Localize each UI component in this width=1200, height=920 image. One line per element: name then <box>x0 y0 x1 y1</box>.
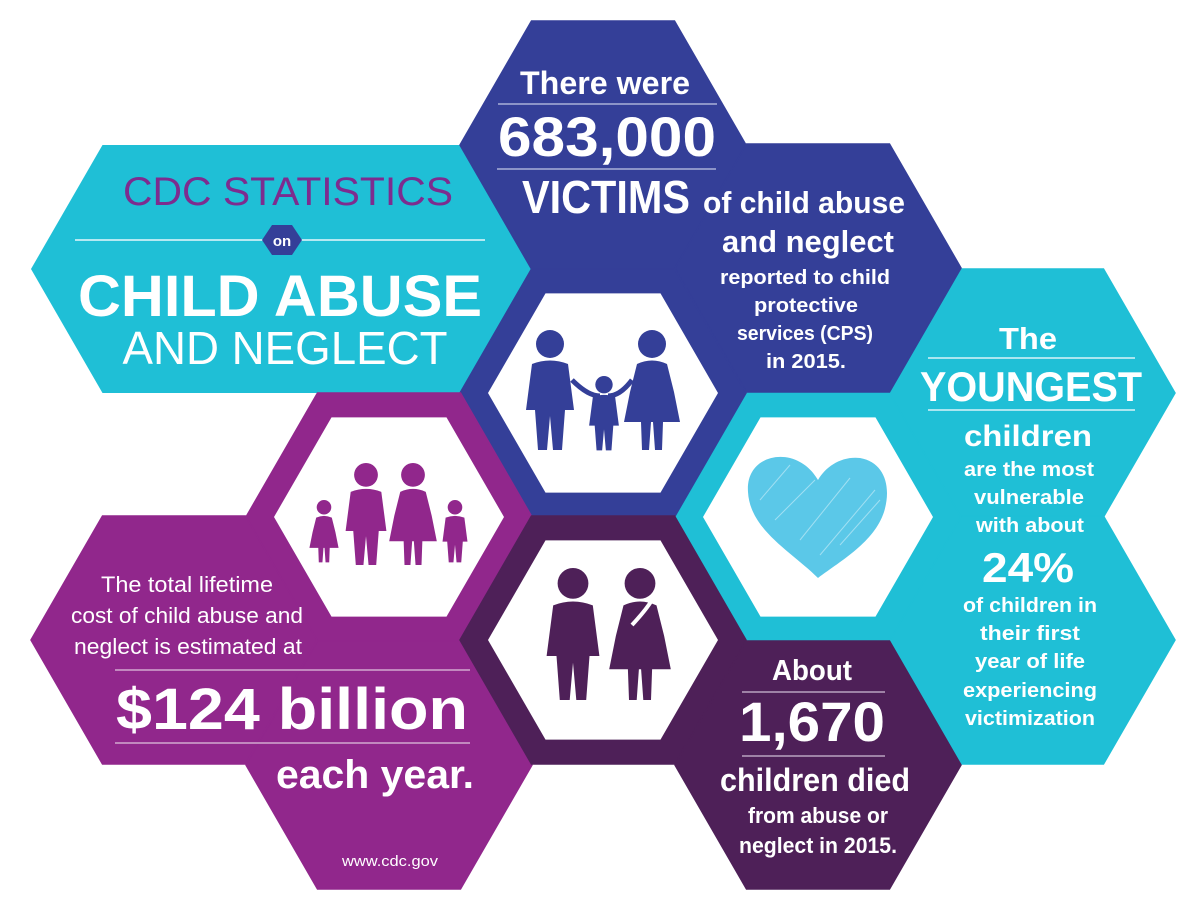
text: youngest: 24% <box>982 544 1074 591</box>
text: deaths: from abuse or <box>748 803 888 828</box>
text: youngest <box>920 321 1142 730</box>
text: victims: and neglect <box>722 224 894 259</box>
badge: on: on <box>273 233 291 250</box>
text: youngest: vulnerable <box>974 487 1084 509</box>
text: youngest: their first <box>980 623 1080 645</box>
icon: family of four in purple hex <box>274 417 504 617</box>
heading: CHILD ABUSE: CHILD ABUSE <box>78 264 482 329</box>
text: cost: $124 billion <box>116 677 468 742</box>
text: deaths: children died <box>720 762 910 798</box>
text: youngest: with about <box>975 515 1084 537</box>
panel: cyan youngest children <box>675 269 1175 764</box>
text: victims <box>497 65 905 373</box>
panel: title hexagon <box>31 145 532 393</box>
text: cost: The total lifetime <box>101 572 273 597</box>
heading: AND NEGLECT: AND NEGLECT <box>122 322 448 374</box>
text: youngest: The <box>999 321 1057 356</box>
text: deaths <box>720 655 910 858</box>
text: youngest: of children in <box>963 595 1097 617</box>
text: cost: www.cdc.gov <box>341 853 439 870</box>
text: youngest: YOUNGEST <box>920 363 1142 410</box>
badge: on <box>262 225 302 255</box>
text: victims: VICTIMS <box>522 171 690 223</box>
text: victims: reported to child <box>720 267 890 289</box>
text: youngest: are the most <box>964 459 1094 481</box>
icon: couple in dark purple hex <box>488 540 718 740</box>
text: victims: in 2015. <box>766 351 846 373</box>
text: victims: of child abuse <box>703 185 905 220</box>
icon: family of three in blue hex <box>488 293 718 493</box>
text: deaths: 1,670 <box>739 690 885 753</box>
text: youngest: year of life <box>975 651 1085 673</box>
text: cost: neglect is estimated at <box>74 634 302 659</box>
text: victims: protective <box>754 295 858 317</box>
text: cost <box>71 572 474 870</box>
text: victims: There were <box>520 65 690 101</box>
panel: blue victims <box>460 21 961 517</box>
text: youngest: experiencing <box>963 680 1097 702</box>
text: deaths: About <box>772 655 852 687</box>
title: CDC STATISTICS: CDC STATISTICS <box>123 170 453 214</box>
text: cost: cost of child abuse and <box>71 603 303 628</box>
text: youngest: children <box>964 420 1092 453</box>
panel: dark purple deaths <box>460 516 961 889</box>
panel: purple cost <box>31 393 532 889</box>
icon: heart in cyan hex <box>703 417 933 617</box>
text: victims: 683,000 <box>498 105 716 168</box>
text: youngest: victimization <box>965 708 1095 730</box>
text: cost: each year. <box>276 753 474 797</box>
text: deaths: neglect in 2015. <box>739 833 897 858</box>
text: victims: services (CPS) <box>737 323 873 345</box>
